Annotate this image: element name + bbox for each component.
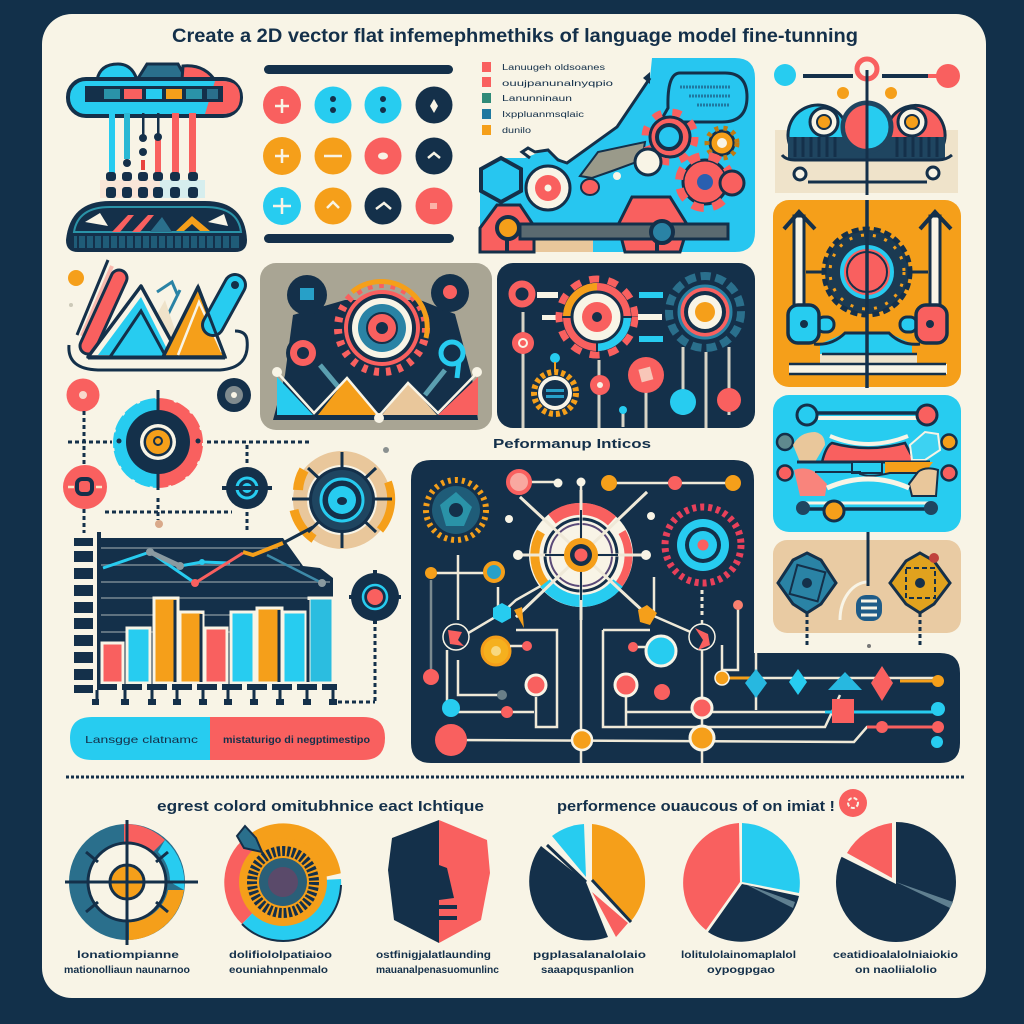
legend: ouujpanunalnyqpio xyxy=(502,79,614,88)
centre gear xyxy=(559,279,635,355)
icon: split head xyxy=(388,820,490,943)
central radial target xyxy=(513,490,651,620)
icon: grey node top xyxy=(217,378,251,412)
caption six: on naoliialolio xyxy=(855,965,937,976)
caption two xyxy=(229,950,332,976)
right junction xyxy=(689,624,715,650)
caption two: eouniahnpenmalo xyxy=(229,965,328,976)
network wiring xyxy=(431,482,938,763)
legend: Ixppluanmsqlaic xyxy=(502,110,584,119)
caption five: lolitulolainomaplalol xyxy=(681,950,796,961)
caption five xyxy=(681,950,796,976)
panel: cyan bridge diagram xyxy=(773,395,961,532)
caption five: oypogpgao xyxy=(707,965,775,976)
left arrow xyxy=(784,212,815,306)
section heading: performance metrics: Peformanup Inticos xyxy=(493,436,651,451)
blue star xyxy=(778,553,836,613)
legend pill: mistaturigo di negptimestipo xyxy=(223,734,370,746)
right knob xyxy=(900,305,947,343)
legend xyxy=(482,62,614,135)
right arrow xyxy=(920,212,951,306)
icon: coral node top xyxy=(66,378,100,412)
left junction xyxy=(443,624,469,650)
chart: pie three xyxy=(836,815,956,942)
icon: crosshair dial xyxy=(65,820,198,945)
icon: top right gear machine xyxy=(774,59,960,195)
icon: coral badge xyxy=(839,789,867,817)
panel: dark gear metrics xyxy=(497,263,755,428)
icon: right navy node xyxy=(349,570,401,624)
legend pill xyxy=(70,717,385,760)
caption three: ostfinigjalatlaunding xyxy=(376,950,491,961)
orange gear xyxy=(707,128,737,158)
legend pill: Lansgge clatnamc xyxy=(85,734,198,746)
central gear xyxy=(338,282,427,372)
small orange gear xyxy=(534,372,576,414)
large coral gear xyxy=(679,156,744,208)
icon: stacked mountains xyxy=(68,260,247,370)
panel: central network xyxy=(411,460,960,763)
legend: Lanuugeh oldsoanes xyxy=(502,63,605,72)
heading: performance outcomes: performence ouaucous of on imiat ! xyxy=(557,798,835,815)
speech bubble xyxy=(660,73,747,122)
grey arm xyxy=(580,142,645,178)
panel: sand icons xyxy=(773,532,961,633)
caption three: mauanalpenasuomunlinc xyxy=(376,965,499,976)
connector bar xyxy=(497,217,728,252)
caption six xyxy=(833,950,958,976)
icon: orbit target xyxy=(292,452,392,548)
left spiky gear xyxy=(426,480,486,540)
icon: split gear xyxy=(113,390,203,490)
right coral gear xyxy=(665,507,741,583)
caption one: lonatiompianne xyxy=(77,950,180,961)
coral gear xyxy=(645,112,695,162)
caption two: dolifiololpatiaioo xyxy=(229,950,332,961)
icon: concentric ring xyxy=(224,823,342,941)
legend: dunilo xyxy=(502,126,532,135)
caption four: saaapquspanlion xyxy=(541,965,634,976)
teal gear xyxy=(669,276,741,348)
panel: orange tuning gear xyxy=(773,200,961,388)
icon: navy node xyxy=(222,467,272,509)
line series xyxy=(103,527,326,587)
title: Create a 2D vector flat infemephmethiks of language model fine-tunning xyxy=(172,26,858,47)
divider xyxy=(66,776,966,778)
chart: pie one xyxy=(529,824,645,940)
bars xyxy=(102,598,333,683)
legend: Lanunninaun xyxy=(502,94,572,103)
gear xyxy=(824,229,910,315)
ladder axis xyxy=(74,538,93,693)
icon: coral node left xyxy=(63,465,107,509)
left knob xyxy=(788,305,834,343)
button grid panel xyxy=(263,65,454,243)
coral target xyxy=(526,166,570,210)
caption four: pgplasalanalolaio xyxy=(533,950,646,961)
status markers xyxy=(745,666,945,748)
amber star xyxy=(890,553,950,613)
lower coral housings xyxy=(480,205,534,252)
caption four xyxy=(533,950,646,976)
hexagon xyxy=(481,158,521,202)
caption one xyxy=(64,950,190,976)
caption six: ceatidioalalolniaiokio xyxy=(833,950,958,961)
heading: colour technique: egrest colord omitubhnice eact Ichtique xyxy=(157,798,484,815)
caption one: mationolliaun naunarnoo xyxy=(64,965,190,976)
icon: top left machine xyxy=(66,64,247,252)
small database icon xyxy=(856,595,882,621)
chart: bars and lines xyxy=(74,527,337,702)
dashed connectors xyxy=(68,411,375,702)
caption three xyxy=(376,950,499,976)
peaks xyxy=(272,367,482,423)
panel: taupe gear and peaks xyxy=(260,263,492,430)
panel: cyan gears diagram xyxy=(480,58,755,252)
chart: pie two xyxy=(683,823,800,942)
